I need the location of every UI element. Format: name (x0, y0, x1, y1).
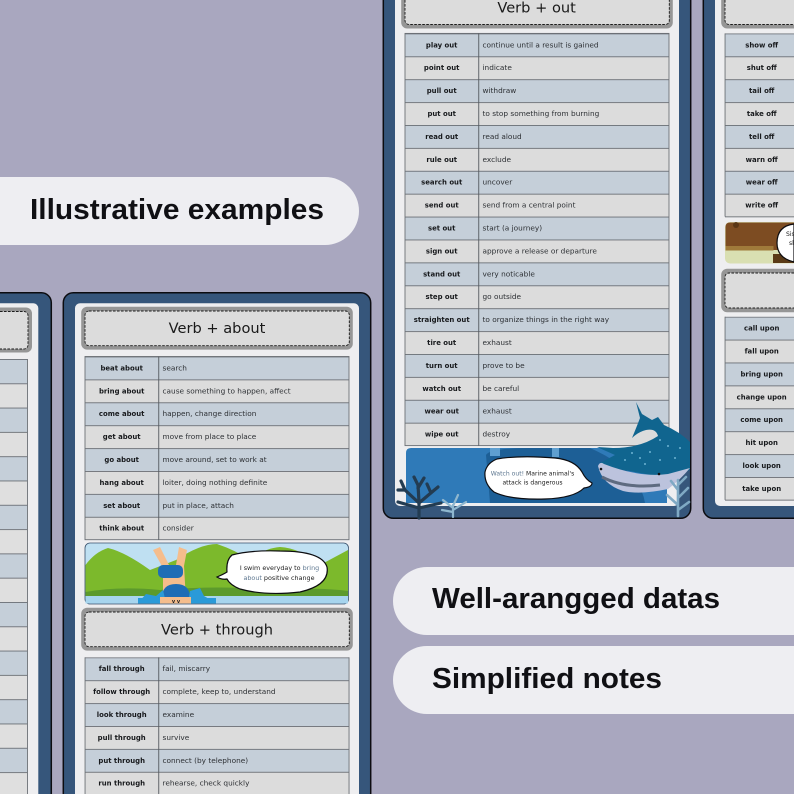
table: out phrasal verbs: search out (421, 179, 463, 187)
table: out phrasal verbs: read aloud (482, 132, 522, 141)
table: out phrasal verbs: sign out (426, 247, 458, 255)
table: off phrasal verbs: show off (745, 41, 779, 49)
callout: simplified notes: Simplified notes (432, 663, 662, 695)
table: out phrasal verbs: point out (424, 64, 460, 72)
table: out phrasal verbs: watch out (422, 385, 462, 393)
illustration: swimmer diving banner (85, 543, 348, 605)
heading: second cropped (721, 269, 794, 312)
heading: Verb + out: Verb + out (497, 0, 576, 16)
table: upon phrasal verbs: change upon (737, 393, 787, 401)
table: upon phrasal verbs: take upon (742, 485, 781, 493)
coral: light left (442, 495, 466, 517)
callout: illustrative examples (0, 177, 359, 245)
callout: illustrative examples: Illustrative examples (30, 194, 324, 226)
table: out phrasal verbs: stand out (423, 270, 461, 278)
table: out phrasal verbs: wipe out (425, 431, 459, 439)
speech bubble: about positive change (243, 574, 315, 582)
table: out phrasal verbs: exhaust (482, 407, 512, 416)
table: through phrasal verbs: examine (162, 710, 195, 719)
table: about phrasal verbs: hang about (100, 479, 145, 487)
table: through phrasal verbs: look through (97, 711, 147, 719)
table: off phrasal verbs: take off (747, 110, 777, 118)
table: out phrasal verbs: play out (426, 41, 458, 49)
whale shark (597, 402, 690, 493)
table: about phrasal verbs (85, 356, 349, 540)
illustration: swimmer diving banner: v v (172, 599, 181, 605)
table: through phrasal verbs: pull through (98, 734, 146, 742)
heading: top cropped (721, 0, 794, 28)
table: out phrasal verbs: continue until a result is gained (482, 40, 599, 49)
table: out phrasal verbs: send out (425, 202, 459, 210)
table: out phrasal verbs: indicate (482, 63, 512, 72)
panel: right cropped card (703, 0, 794, 518)
table: out phrasal verbs: go outside (482, 292, 522, 301)
table: upon phrasal verbs (725, 317, 794, 501)
table: out phrasal verbs: read out (425, 133, 459, 141)
table: out phrasal verbs: put out (427, 110, 457, 118)
table: out phrasal verbs: exclude (482, 155, 511, 164)
speech bubble: sl (789, 240, 794, 247)
table: out phrasal verbs: wear out (424, 408, 460, 416)
table: off phrasal verbs: write off (745, 202, 779, 210)
table: off phrasal verbs: wear off (746, 179, 778, 187)
table: through phrasal verbs: run through (98, 780, 145, 788)
table: out phrasal verbs: pull out (427, 87, 457, 95)
table: out phrasal verbs: tire out (427, 339, 457, 347)
table: off phrasal verbs: warn off (746, 156, 778, 164)
table: out phrasal verbs: uncover (482, 178, 513, 187)
illustration: brown room banner (725, 222, 794, 264)
table: about phrasal verbs: go about (104, 456, 140, 464)
callout: well-arranged data (393, 567, 794, 635)
table: about phrasal verbs: happen, change direction (162, 409, 257, 418)
table: out phrasal verbs (405, 33, 669, 446)
table: out phrasal verbs: start (a journey) (482, 224, 542, 233)
table: upon phrasal verbs: fall upon (745, 348, 779, 356)
panel: left cropped card (0, 293, 51, 794)
table: off phrasal verbs: shut off (747, 64, 777, 72)
table: upon phrasal verbs: look upon (743, 462, 781, 470)
table: about phrasal verbs: beat about (100, 364, 144, 372)
table: through phrasal verbs: put through (98, 757, 145, 765)
table: out phrasal verbs: send from a central point (482, 201, 576, 210)
table: about phrasal verbs: bring about (99, 387, 145, 395)
table: through phrasal verbs: follow through (93, 688, 150, 696)
table: through phrasal verbs (85, 657, 349, 794)
table: about phrasal verbs: move from place to place (162, 432, 257, 441)
table: about phrasal verbs: come about (99, 410, 145, 418)
table: out phrasal verbs: straighten out (414, 316, 470, 324)
table: off phrasal verbs: tell off (749, 133, 775, 141)
table: out phrasal verbs: step out (426, 293, 459, 301)
speech bubble (777, 224, 794, 262)
table: about phrasal verbs: think about (99, 525, 145, 533)
table: out phrasal verbs: be careful (482, 384, 519, 393)
speech bubble: Watch out! Marine animal's (491, 470, 574, 478)
table: through phrasal verbs: fall through (99, 665, 145, 673)
heading: Verb + through (81, 608, 353, 651)
table: out phrasal verbs: withdraw (482, 86, 516, 95)
table: about phrasal verbs: set about (103, 502, 141, 510)
table: out phrasal verbs: prove to be (482, 361, 525, 370)
table: out phrasal verbs: turn out (426, 362, 458, 370)
speech bubble (217, 551, 327, 593)
illustration: ocean banner with whale shark (398, 402, 690, 518)
table: out phrasal verbs: to organize things in the right way (482, 315, 610, 324)
table: through phrasal verbs: complete, keep to, understand (162, 687, 276, 696)
table: off phrasal verbs (725, 33, 794, 217)
table: about phrasal verbs: loiter, doing nothing definite (162, 478, 268, 487)
table: upon phrasal verbs: bring upon (740, 370, 783, 378)
table: out phrasal verbs: exhaust (482, 338, 512, 347)
table: out phrasal verbs: to stop something from burning (482, 109, 599, 118)
table: upon phrasal verbs: call upon (744, 325, 779, 333)
table: about phrasal verbs: get about (103, 433, 141, 441)
table: out phrasal verbs: very noticable (482, 269, 535, 278)
table: about phrasal verbs: put in place, attach (162, 501, 234, 510)
table: through phrasal verbs: connect (by telephone) (162, 756, 248, 765)
table: about phrasal verbs: cause something to happen, affect (162, 386, 291, 395)
table: upon phrasal verbs: hit upon (745, 439, 778, 447)
table: about phrasal verbs: consider (162, 524, 195, 533)
table: out phrasal verbs: rule out (426, 156, 458, 164)
table: through phrasal verbs: survive (162, 733, 190, 742)
speech bubble: I swim everyday to bring (240, 564, 319, 572)
table: out phrasal verbs: destroy (482, 430, 511, 439)
heading: Verb + about: Verb + about (169, 320, 266, 337)
coral: light right (667, 477, 689, 516)
speech bubble: attack is dangerous (502, 480, 563, 486)
table: off phrasal verbs: tail off (749, 87, 775, 95)
panel: verb + out card (383, 0, 691, 518)
table: out phrasal verbs: approve a release or departure (482, 246, 597, 255)
heading: Verb + through: Verb + through (161, 622, 273, 638)
table: through phrasal verbs: fail, miscarry (162, 664, 211, 673)
callout: simplified notes (393, 646, 794, 714)
table: out phrasal verbs: set out (428, 225, 456, 233)
table: about phrasal verbs: search (162, 363, 187, 372)
table: through phrasal verbs: rehearse, check quickly (162, 779, 250, 788)
table: upon phrasal verbs: come upon (740, 416, 783, 424)
table: about phrasal verbs: move around, set to work at (162, 455, 267, 464)
heading: Verb + about (81, 307, 353, 350)
coral: dark (398, 477, 441, 518)
speech bubble (485, 457, 592, 499)
panel: verb + about card (63, 293, 371, 794)
heading: Verb + out (401, 0, 673, 28)
callout: well-arranged data: Well-arangged datas (432, 583, 720, 615)
